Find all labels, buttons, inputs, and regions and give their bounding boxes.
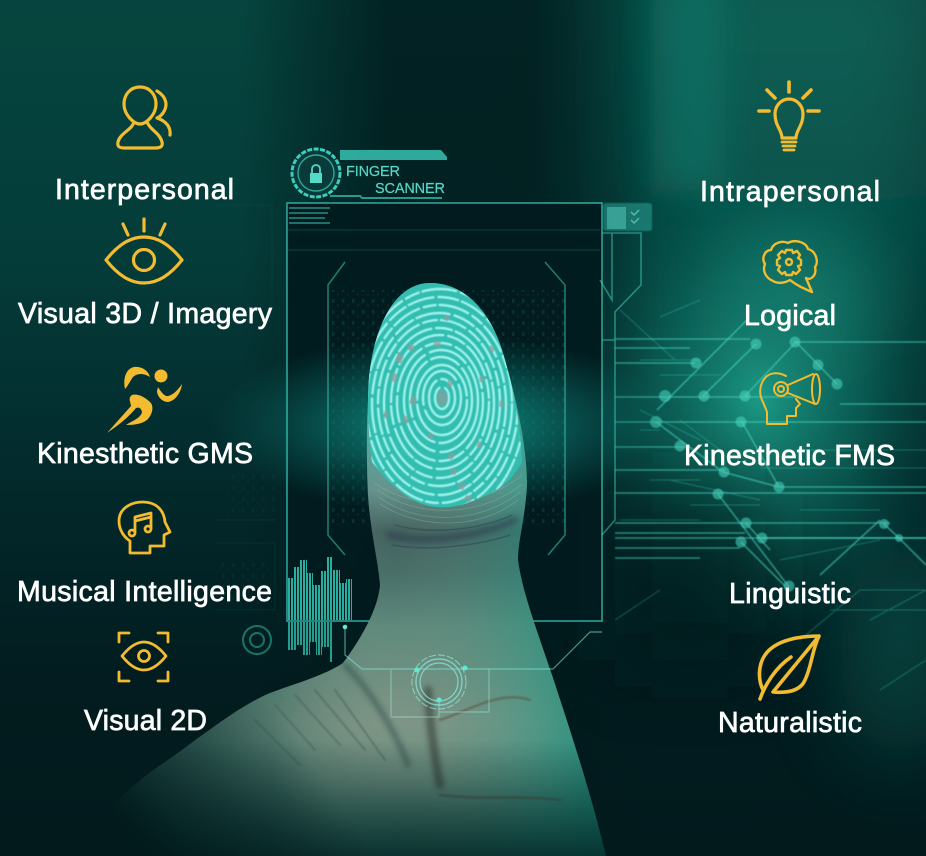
skin creases bbox=[255, 475, 560, 800]
icon: leaf bbox=[759, 636, 819, 699]
label: Visual 3D / Imagery: Visual 3D / Imagery bbox=[18, 298, 273, 330]
faint left HUD chart bbox=[215, 205, 275, 610]
icon: lightbulb bbox=[759, 82, 819, 150]
icon: padlock bbox=[292, 149, 340, 197]
panel: circuit board lines bbox=[615, 300, 926, 690]
icon: brain with gear bbox=[763, 241, 817, 292]
icon: interpersonal people bbox=[118, 87, 170, 148]
label: Visual 2D: Visual 2D bbox=[84, 705, 207, 737]
fingerprint bbox=[368, 283, 522, 508]
icon: checklist widget bbox=[603, 203, 652, 231]
panel: finger scanner label bbox=[292, 149, 447, 198]
illustration: thumb bbox=[128, 283, 606, 856]
label: Linguistic: Linguistic bbox=[729, 578, 851, 610]
equalizer bars bbox=[287, 557, 352, 662]
icon: eye in focus frame bbox=[119, 633, 168, 681]
panel: scanner HUD frame bbox=[210, 203, 680, 662]
icon: runner bbox=[107, 367, 182, 433]
label: Kinesthetic FMS: Kinesthetic FMS bbox=[684, 440, 895, 472]
panel: finger scanner label: FINGER bbox=[346, 164, 400, 180]
label: Naturalistic: Naturalistic bbox=[718, 707, 862, 739]
label: Musical Intelligence: Musical Intelligence bbox=[17, 576, 272, 608]
panel: base connector and target ring bbox=[343, 625, 602, 717]
label: Kinesthetic GMS: Kinesthetic GMS bbox=[37, 438, 253, 470]
label: Logical: Logical bbox=[744, 300, 836, 332]
label: Intrapersonal: Intrapersonal bbox=[700, 176, 880, 208]
icon: head with music note bbox=[119, 502, 170, 553]
icon: eye with rays bbox=[106, 219, 182, 283]
panel: finger scanner label: SCANNER bbox=[375, 181, 445, 197]
label: Interpersonal: Interpersonal bbox=[55, 174, 234, 206]
icon: head with megaphone bbox=[760, 373, 820, 424]
